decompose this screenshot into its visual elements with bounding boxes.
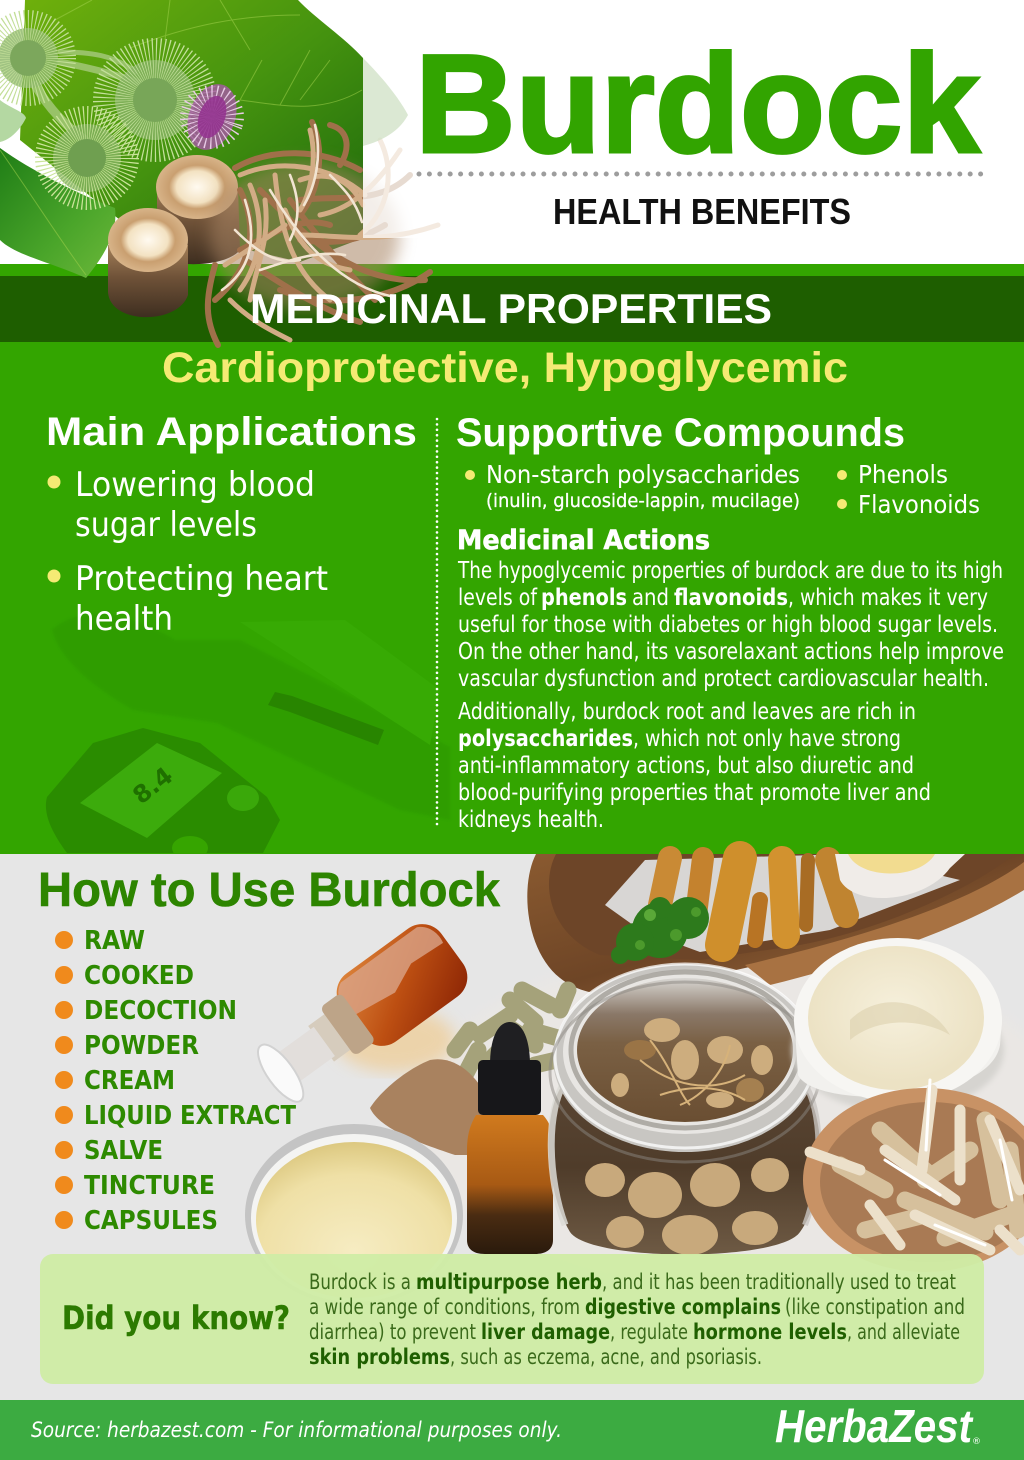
faded root overlay: [363, 40, 453, 238]
compound: polysaccharides: (inulin, glucoside-lappin, mucilage): [486, 490, 800, 512]
use: cooked: COOKED: [84, 961, 194, 991]
paragraph one: flavonoids: [674, 585, 788, 611]
callout text: liver damage: [481, 1320, 610, 1344]
callout: did you know: [40, 1254, 984, 1384]
panel: supportive compounds: [456, 411, 980, 519]
burr centre: [115, 60, 195, 140]
logo: HerbaZest: HerbaZest: [775, 1400, 973, 1452]
compound: polysaccharides: [465, 460, 800, 512]
use: decoction: DECOCTION: [84, 996, 237, 1026]
subheading: properties list: Cardioprotective, Hypoglycemic: [162, 344, 848, 392]
root tangle: [208, 122, 438, 345]
faded leaf tip: [363, 58, 408, 146]
callout heading: Did you know?: [62, 1299, 290, 1337]
use: powder: POWDER: [84, 1031, 199, 1061]
paragraph one: phenols: [541, 585, 627, 611]
stems: [35, 52, 145, 140]
leaf veins: [0, 0, 362, 275]
illustration: blood glucose meter and insulin pen, green tinted: [46, 614, 450, 860]
dotted divider: [419, 172, 981, 176]
photo: burdock preparations: [245, 854, 1024, 1306]
paragraph one: [457, 558, 1004, 692]
bullet: lowering blood sugar: [48, 465, 315, 545]
paragraph one: and: [632, 585, 669, 611]
panel: main applications: [46, 410, 417, 639]
heading: main applications: Main Applications: [46, 410, 417, 454]
use: tincture: TINCTURE: [84, 1171, 215, 1201]
illustration: burdock leaves, burrs and roots: [0, 0, 453, 345]
subtitle: HEALTH BENEFITS: [553, 191, 851, 232]
heading: medicinal properties: MEDICINAL PROPERTIES: [250, 285, 772, 332]
powder: [370, 1059, 492, 1155]
title: Burdock: [415, 25, 980, 182]
callout text: diarrhea) to prevent: [309, 1320, 476, 1344]
root chunk front: [108, 208, 188, 317]
compound: flavonoids: Flavonoids: [858, 490, 980, 519]
callout text: , and alleviate: [847, 1320, 960, 1344]
sauce cup: [835, 854, 965, 898]
callout text: Burdock is a: [309, 1270, 411, 1294]
callout text: [309, 1270, 965, 1369]
burr lower: [53, 124, 121, 192]
paragraph two: kidneys health.: [458, 807, 604, 833]
footer: [0, 1400, 1024, 1460]
salve tin: [245, 1124, 463, 1306]
compound: polysaccharides: Non-starch polysaccharides: [486, 460, 800, 489]
wooden dish with burdock fries: [527, 854, 1024, 995]
heading: medicinal actions: Medicinal Actions: [457, 525, 710, 556]
bullet: protecting heart health: [48, 559, 328, 639]
use: raw: [55, 926, 145, 956]
amber oil bottle: [245, 915, 477, 1115]
source note: Source: herbazest.com - For informational purposes only.: [31, 1418, 562, 1442]
paragraph two: blood-purifying properties that promote liver and: [458, 780, 931, 806]
vertical dotted divider: [436, 419, 438, 828]
panel: medicinal properties background: [0, 264, 1024, 854]
main burdock leaf: [20, 0, 363, 262]
callout text: , regulate: [610, 1320, 688, 1344]
parsley: [611, 897, 709, 964]
paragraph one: levels of: [458, 585, 538, 611]
compound: phenols: Phenols: [858, 460, 948, 489]
bullet: lowering blood sugar: Lowering blood: [75, 465, 315, 505]
callout text: hormone levels: [693, 1320, 847, 1344]
bowl of dried burdock root: [803, 1080, 1024, 1272]
callout text: (like constipation and: [785, 1295, 965, 1319]
burr left: [0, 28, 58, 88]
paragraph two: polysaccharides: [458, 726, 633, 752]
use: raw: RAW: [84, 926, 145, 956]
lower left leaf: [0, 148, 115, 278]
bullet: protecting heart health: Protecting heart: [75, 559, 328, 599]
illustration: blood glucose meter and insulin pen, green tinted: 8.4: [127, 761, 178, 810]
root chunk back: [156, 155, 240, 264]
use: capsules: CAPSULES: [84, 1206, 218, 1236]
use: salve: [55, 1136, 163, 1166]
glass jar with burdock root: [549, 964, 821, 1255]
logo: HerbaZest: ®: [972, 1437, 981, 1447]
left pale leaf scrap: [0, 100, 26, 142]
use: cream: CREAM: [84, 1066, 175, 1096]
heading: supportive compounds: Supportive Compounds: [456, 411, 905, 455]
paragraph two: [458, 699, 931, 833]
bullet: protecting heart health: health: [75, 599, 173, 639]
cream tub: [792, 938, 1004, 1112]
use: cream: [55, 1066, 175, 1096]
callout text: multipurpose herb: [416, 1270, 602, 1294]
callout text: skin problems: [309, 1345, 450, 1369]
paragraph two: anti-inflammatory actions, but also diuretic and: [458, 753, 914, 779]
paragraph two: , which not only have strong: [633, 726, 901, 752]
capsules: [455, 990, 568, 1075]
paragraph two: Additionally, burdock root and leaves are rich in: [458, 699, 916, 725]
dropper bottle: [467, 1022, 553, 1254]
fries: [660, 858, 846, 945]
panel: medicinal actions: [457, 525, 1004, 833]
heading: how to use burdock: How to Use Burdock: [38, 864, 500, 917]
list: uses of burdock: [55, 926, 296, 1236]
panel: how to use background: [0, 854, 1024, 1400]
callout text: , such as eczema, acne, and psoriasis.: [450, 1345, 762, 1369]
soft background light and shadows: [410, 950, 1024, 1290]
purple flower: [179, 77, 245, 157]
bullet: lowering blood sugar: sugar levels: [75, 505, 257, 545]
callout text: digestive complains: [585, 1295, 781, 1319]
use: liquid extract: LIQUID EXTRACT: [84, 1101, 296, 1131]
use: salve: SALVE: [84, 1136, 163, 1166]
callout text: a wide range of conditions, from: [309, 1295, 580, 1319]
